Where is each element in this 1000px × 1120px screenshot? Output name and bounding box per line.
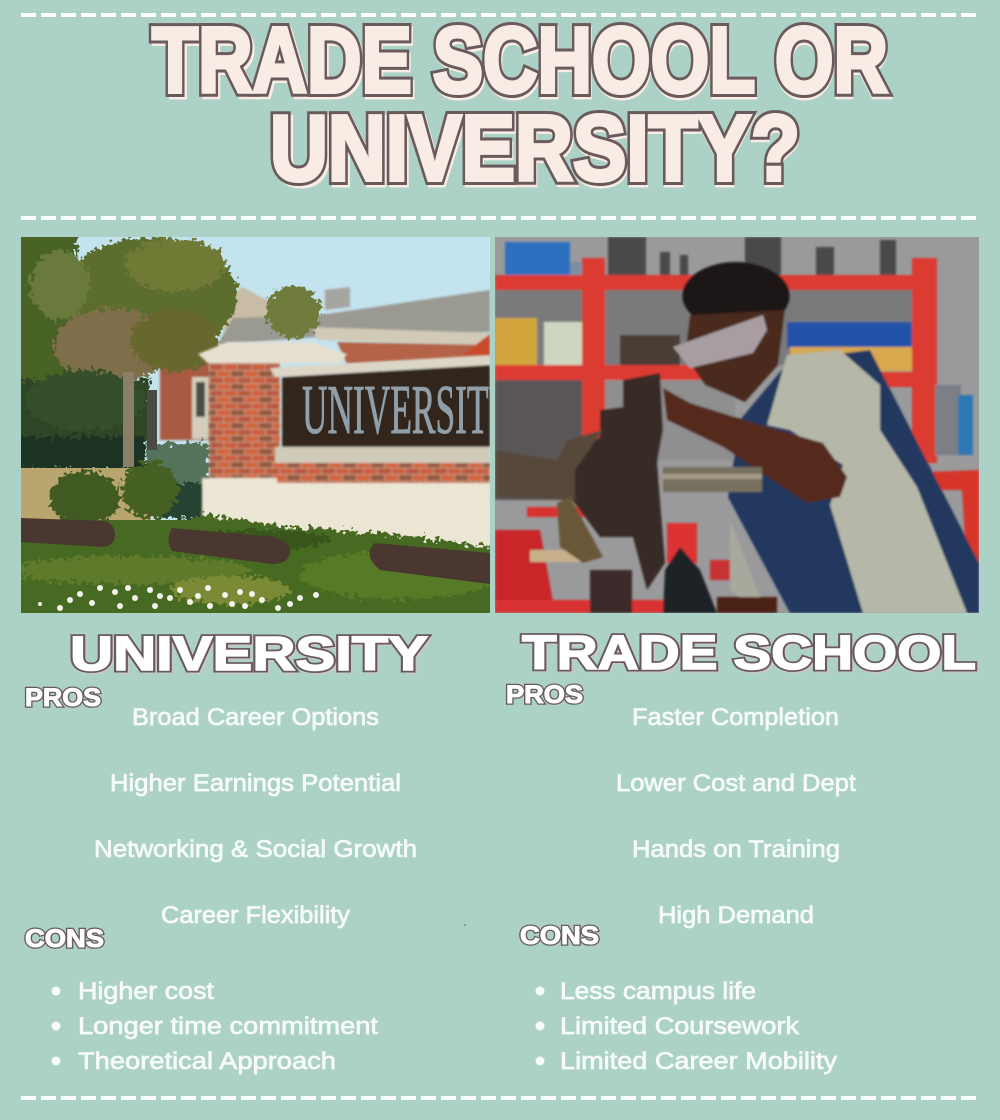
sign lettering: UNIVERSITY — [302, 372, 514, 449]
trade school cons list: Limited Career Mobility — [560, 1048, 837, 1075]
rusty axle hub — [570, 373, 665, 590]
trade school pros list: Hands on Training — [632, 836, 840, 863]
photo: trade school student at workshop — [495, 237, 979, 613]
heading: university: UNIVERSITY — [70, 628, 428, 681]
university cons list — [52, 978, 378, 1075]
title: UNIVERSITY? — [273, 99, 800, 203]
trade school cons list — [536, 978, 837, 1075]
student head — [681, 260, 791, 317]
label: trade school cons: CONS — [520, 922, 599, 950]
title — [152, 8, 888, 203]
student overalls — [728, 350, 979, 613]
label: university cons: CONS — [25, 925, 104, 953]
shelf backs — [495, 290, 935, 365]
title: UNIVERSITY? — [270, 96, 800, 200]
university pros list: Career Flexibility — [161, 902, 350, 929]
top dashed divider — [21, 13, 976, 17]
middle dashed divider — [21, 216, 976, 220]
label: university cons: CONS — [25, 925, 104, 953]
university cons list: Longer time commitment — [78, 1013, 378, 1040]
title: UNIVERSITY? — [270, 96, 800, 200]
university pros list: Networking & Social Growth — [94, 836, 417, 863]
trade school pros list: Lower Cost and Dept — [616, 770, 856, 797]
bottom dashed divider — [21, 1096, 976, 1100]
label: university pros: PROS — [25, 684, 101, 712]
flowers — [38, 585, 319, 611]
trade school cons list: Less campus life — [560, 978, 756, 1005]
heading: university: UNIVERSITY — [70, 628, 428, 681]
student shirt — [767, 350, 967, 613]
label: university pros: PROS — [25, 684, 101, 712]
boxes on shelf — [495, 318, 537, 365]
bushes — [50, 461, 178, 525]
red shelving — [495, 258, 937, 478]
label: trade school cons: CONS — [520, 922, 599, 950]
university cons list: Higher cost — [78, 978, 214, 1005]
trade school cons list: Limited Coursework — [560, 1013, 800, 1040]
university pros list — [94, 704, 417, 929]
red stand — [495, 528, 554, 602]
student arm — [663, 388, 847, 503]
blue boxes top left — [505, 242, 570, 275]
lawn — [21, 468, 151, 520]
university pros list: Broad Career Options — [132, 704, 379, 731]
bottom fitting — [590, 570, 632, 613]
heading: trade school: TRADE SCHOOL — [522, 627, 976, 680]
trade school pros list: High Demand — [658, 902, 814, 929]
sign wall — [198, 342, 490, 548]
heading: university: UNIVERSITY — [72, 630, 430, 683]
heading: trade school: TRADE SCHOOL — [524, 629, 978, 682]
building roof — [160, 287, 490, 440]
heading: trade school: TRADE SCHOOL — [522, 627, 976, 680]
tools on top shelf — [608, 237, 896, 275]
label: trade school pros: PROS — [506, 681, 583, 709]
label: trade school pros: PROS — [506, 681, 583, 709]
sign wall base fill under garden — [21, 520, 191, 560]
right side equipment — [935, 385, 961, 455]
photo: university entrance sign — [21, 237, 490, 613]
garden — [21, 511, 490, 613]
axle shaft — [663, 467, 762, 492]
university cons list: Theoretical Approach — [78, 1048, 336, 1075]
lamp benches — [21, 518, 490, 584]
tree trunk — [123, 372, 134, 467]
trade school pros list — [616, 704, 856, 929]
university pros list: Higher Earnings Potential — [110, 770, 401, 797]
trees and shrubs — [15, 230, 321, 518]
trade school pros list: Faster Completion — [632, 704, 839, 731]
